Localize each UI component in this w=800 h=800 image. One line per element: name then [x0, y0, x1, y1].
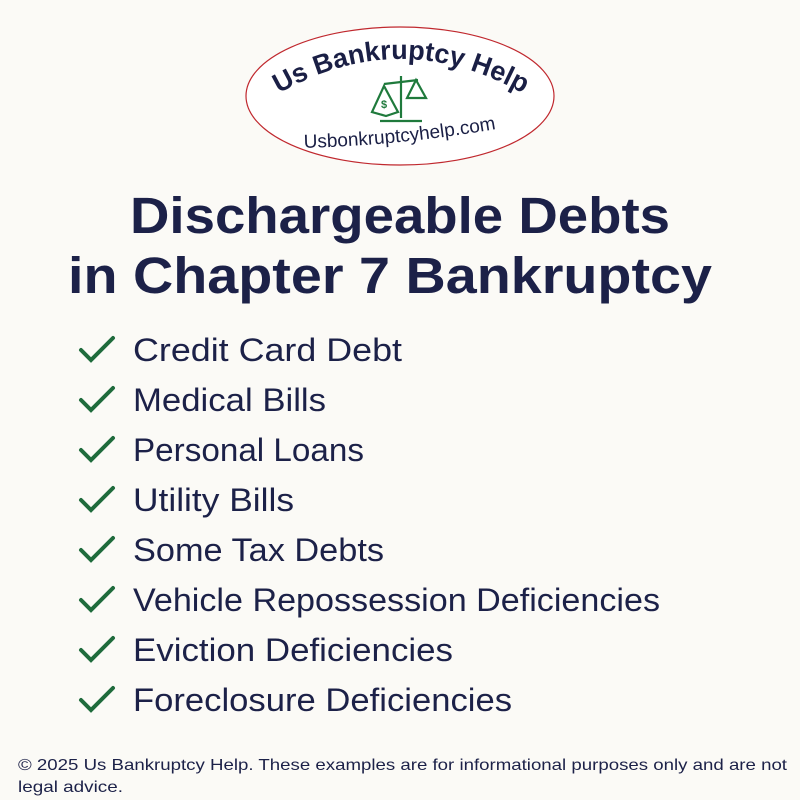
footer disclaimer: © 2025 Us Bankruptcy Help. These examples are for informational purposes only and are not — [18, 757, 788, 774]
list of dischargeable debts: Credit Card Debt — [133, 332, 402, 368]
list of dischargeable debts: Foreclosure Deficiencies — [133, 682, 512, 718]
list of dischargeable debts: Medical Bills — [133, 382, 326, 418]
logo url: Usbonkruptcyhelp.com — [304, 120, 495, 148]
title: Dischargeable Debts — [130, 187, 670, 244]
list of dischargeable debts: Eviction Deficiencies — [133, 632, 453, 668]
list of dischargeable debts: Some Tax Debts — [133, 532, 384, 568]
list of dischargeable debts: Vehicle Repossession Deficiencies — [133, 582, 660, 618]
footer disclaimer: legal advice. — [18, 779, 123, 796]
icon: scales — [372, 76, 426, 121]
list of dischargeable debts: Personal Loans — [133, 432, 364, 468]
footer disclaimer — [18, 757, 788, 796]
icon: scales: $ — [381, 99, 387, 111]
title — [68, 187, 713, 304]
list of dischargeable debts: Utility Bills — [133, 482, 294, 518]
title: in Chapter 7 Bankruptcy — [68, 247, 713, 304]
list of dischargeable debts — [81, 332, 660, 718]
logo — [245, 26, 555, 166]
logo name: Us Bankruptcy Help — [272, 42, 527, 94]
